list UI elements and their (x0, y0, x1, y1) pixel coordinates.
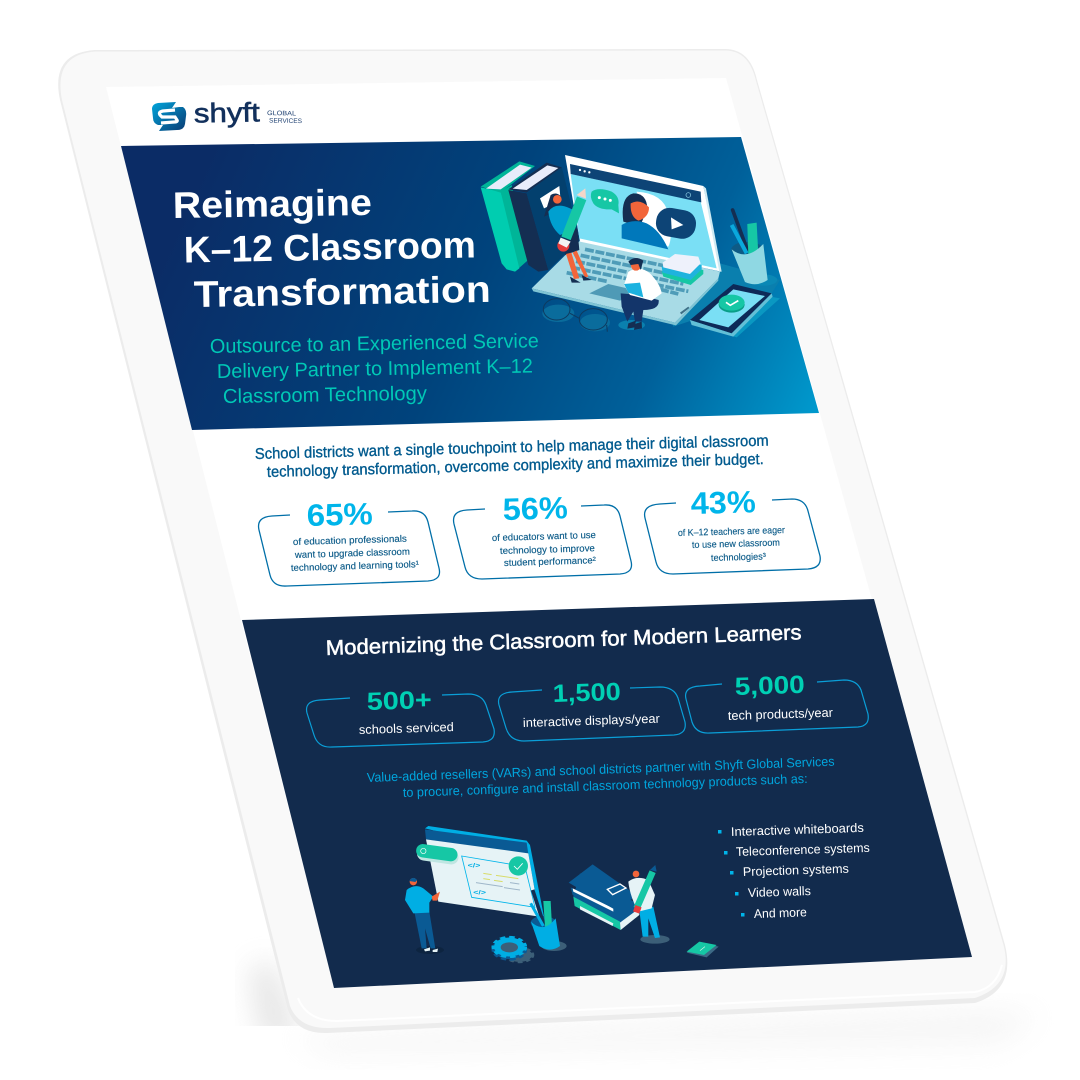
list item: video walls: Video walls (748, 884, 811, 900)
stat card: 65%: 65% (306, 496, 373, 533)
partner description (367, 754, 835, 800)
stat card: 5,000 (686, 671, 868, 733)
laptop shadow (670, 263, 780, 327)
stat card: 65%: want to upgrade classroom (294, 547, 410, 561)
small device (687, 942, 719, 957)
list item: interactive whiteboards: Interactive whiteboards (731, 821, 864, 839)
stat card: 1,500: interactive displays/year (523, 712, 660, 730)
list item: projection systems: Projection systems (743, 862, 849, 879)
stat card: 500+: schools serviced (359, 720, 454, 737)
logo descriptor (267, 110, 303, 125)
stat card: 65%: of education professionals (293, 534, 407, 548)
logo (152, 97, 303, 131)
tablet screen (106, 78, 972, 988)
stat card: 43% (645, 484, 820, 574)
illustration: laptop with teacher and student (532, 155, 722, 332)
stat card: 5,000: tech products/year (728, 706, 833, 723)
man at window (405, 878, 444, 954)
stat card: 56% (454, 490, 632, 579)
laptop (532, 155, 722, 325)
illustration: books, cup and tablet (481, 161, 780, 337)
tablet shadow (250, 960, 1040, 1055)
icon: shyft logo mark (152, 102, 186, 131)
pencil cup (731, 210, 777, 286)
hero title: Reimagine (172, 182, 372, 226)
product list (718, 821, 870, 921)
illustration: web window with people and books (405, 826, 719, 962)
intro text: technology transformation, overcome complexity and maximize their budget. (267, 451, 764, 481)
panel: modernizing the classroom (242, 599, 972, 988)
stat card: 56%: student performance² (504, 555, 596, 569)
logo wordmark: shyft (194, 97, 261, 128)
intro text (255, 433, 769, 481)
stat card: 56%: technology to improve (500, 543, 595, 557)
browser window: </> (468, 862, 480, 869)
stat card: 43%: technologies³ (711, 551, 766, 564)
stat card: 1,500 (499, 678, 685, 741)
stat card: 500+: 500+ (366, 686, 432, 716)
logo descriptor: GLOBAL (267, 110, 297, 118)
browser window: </> (473, 890, 486, 897)
stat card: 56%: 56% (502, 490, 568, 527)
hero title: K–12 Classroom (183, 224, 476, 270)
gear (494, 937, 532, 962)
partner description: Value-added resellers (VARs) and school districts partner with Shyft Global Services (367, 754, 835, 785)
student reading (618, 258, 662, 330)
pencil cup (531, 890, 567, 951)
stat card: 5,000: 5,000 (734, 671, 805, 701)
stat card: 43%: 43% (690, 484, 756, 521)
stat card: 65% (259, 496, 440, 586)
video call on screen (591, 189, 698, 249)
section heading: Modernizing the Classroom for Modern Learners (325, 621, 802, 660)
hero title: Transformation (193, 269, 491, 315)
stat card: 500+ (307, 686, 494, 747)
hero subtitle: Classroom Technology (223, 383, 427, 408)
panel: hero banner (121, 137, 819, 430)
stat card: 43%: of K–12 teachers are eager (678, 525, 785, 539)
hero subtitle: Delivery Partner to Implement K–12 (217, 355, 533, 383)
person with pencil (628, 865, 670, 944)
hero title (172, 182, 491, 315)
hero subtitle: Outsource to an Experienced Service (210, 330, 539, 358)
list item: teleconference systems: Teleconference systems (736, 841, 870, 859)
stat card: 65%: technology and learning tools¹ (291, 559, 419, 574)
list item: and more: And more (754, 905, 807, 921)
tablet with check mark (690, 284, 780, 337)
logo descriptor: SERVICES (269, 118, 303, 125)
books (481, 161, 580, 272)
browser window (415, 826, 544, 917)
paper stack (662, 254, 703, 285)
glasses (542, 299, 610, 332)
hero subtitle (210, 330, 539, 408)
partner description: to procure, configure and install classroom technology products such as: (403, 771, 808, 800)
stat card: 56%: of educators want to use (492, 530, 596, 544)
intro text: School districts want a single touchpoint to help manage their digital classroom (255, 433, 769, 463)
stat card: 1,500: 1,500 (552, 678, 621, 708)
stack of books (569, 864, 643, 930)
stat card: 43%: to use new classroom (692, 538, 780, 551)
teacher with pencil (540, 186, 592, 283)
